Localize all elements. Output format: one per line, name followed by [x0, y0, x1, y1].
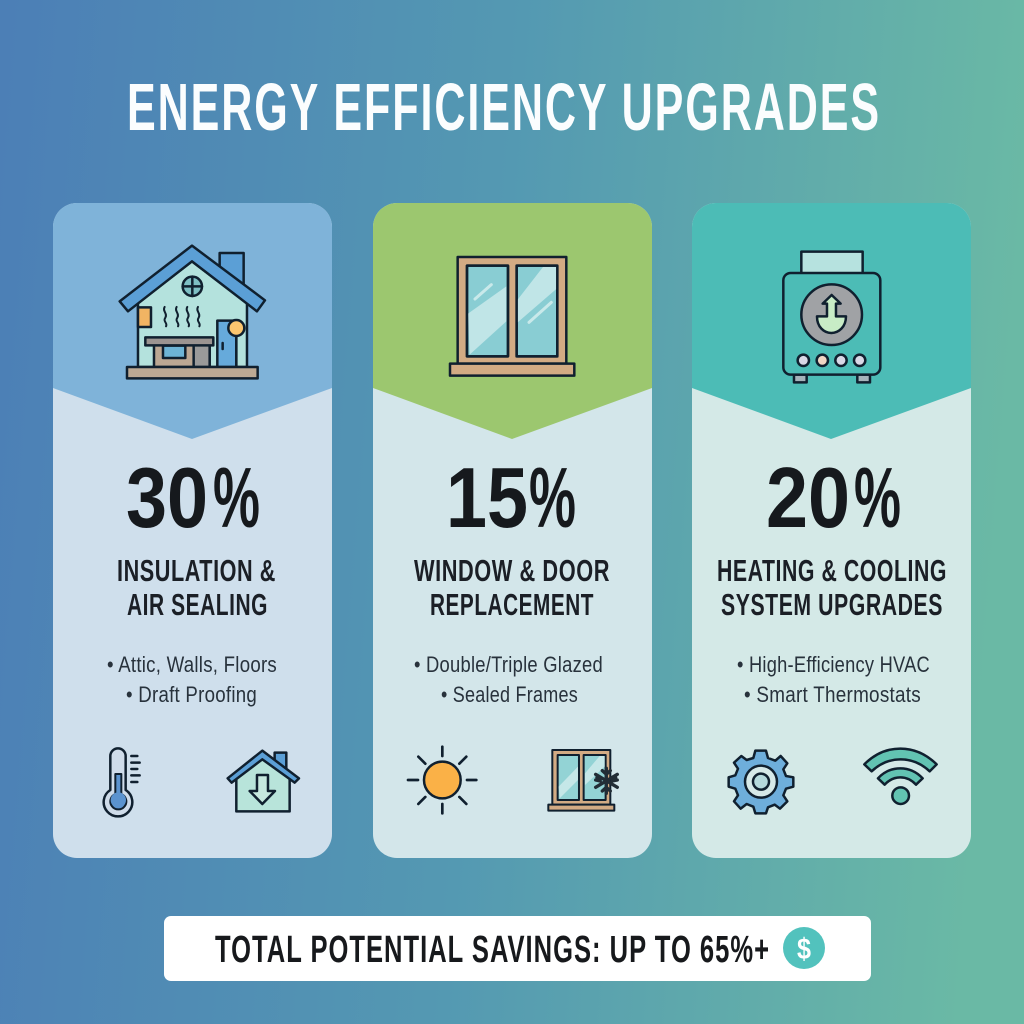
icon: thermometer	[104, 748, 140, 816]
panel background	[53, 203, 332, 858]
bullet list: heating and cooling: • Smart Thermostats	[744, 682, 921, 707]
panel: heating and cooling	[692, 203, 971, 858]
panel background	[692, 203, 971, 858]
percentage: 20%: 20	[766, 451, 850, 546]
bullet list: heating and cooling: • High-Efficiency HVAC	[737, 652, 930, 677]
bullet list: insulation	[107, 652, 277, 707]
percentage: 20%: %	[854, 451, 901, 546]
icon: gear	[729, 751, 793, 813]
banner background	[164, 916, 871, 981]
icon: sun	[408, 747, 476, 813]
heading: window and door	[414, 553, 610, 622]
icon: wifi	[864, 749, 937, 804]
icon: window with snowflake	[548, 750, 617, 811]
panel background	[373, 203, 652, 858]
panel: insulation and air sealing	[53, 203, 332, 858]
percentage: 15%: 15	[446, 451, 528, 546]
heading: insulation: INSULATION &	[117, 553, 276, 588]
heading: heating and cooling	[717, 553, 947, 622]
heading: insulation	[117, 553, 276, 622]
bullet list: window and door: • Sealed Frames	[441, 682, 578, 707]
bullet list: window and door: • Double/Triple Glazed	[414, 652, 603, 677]
percentage: 15%: %	[529, 451, 576, 546]
panel header chevron	[692, 203, 971, 439]
icon: house	[120, 246, 265, 378]
heading: window and door: WINDOW & DOOR	[414, 553, 610, 588]
percentage: 30%: %	[213, 451, 260, 546]
icon: dollar coin: $	[797, 933, 811, 966]
savings banner	[164, 916, 871, 981]
bullet list: insulation: • Draft Proofing	[126, 682, 257, 707]
icon: furnace	[783, 252, 880, 382]
icon: house with down arrow	[228, 751, 299, 811]
bullet list: window and door	[414, 652, 603, 707]
icon: window	[450, 257, 574, 376]
bullet list: insulation: • Attic, Walls, Floors	[107, 652, 277, 677]
percentage: 30%: 30	[126, 451, 208, 546]
bullet list: heating and cooling	[737, 652, 930, 707]
panel header chevron	[53, 203, 332, 439]
banner text: TOTAL POTENTIAL SAVINGS: UP TO 65%+	[215, 929, 770, 971]
panel header chevron	[373, 203, 652, 439]
heading: insulation: AIR SEALING	[127, 587, 268, 622]
heading: window and door: REPLACEMENT	[430, 587, 594, 622]
panel: window and door replacement	[373, 203, 652, 858]
icon: dollar coin	[783, 927, 825, 969]
